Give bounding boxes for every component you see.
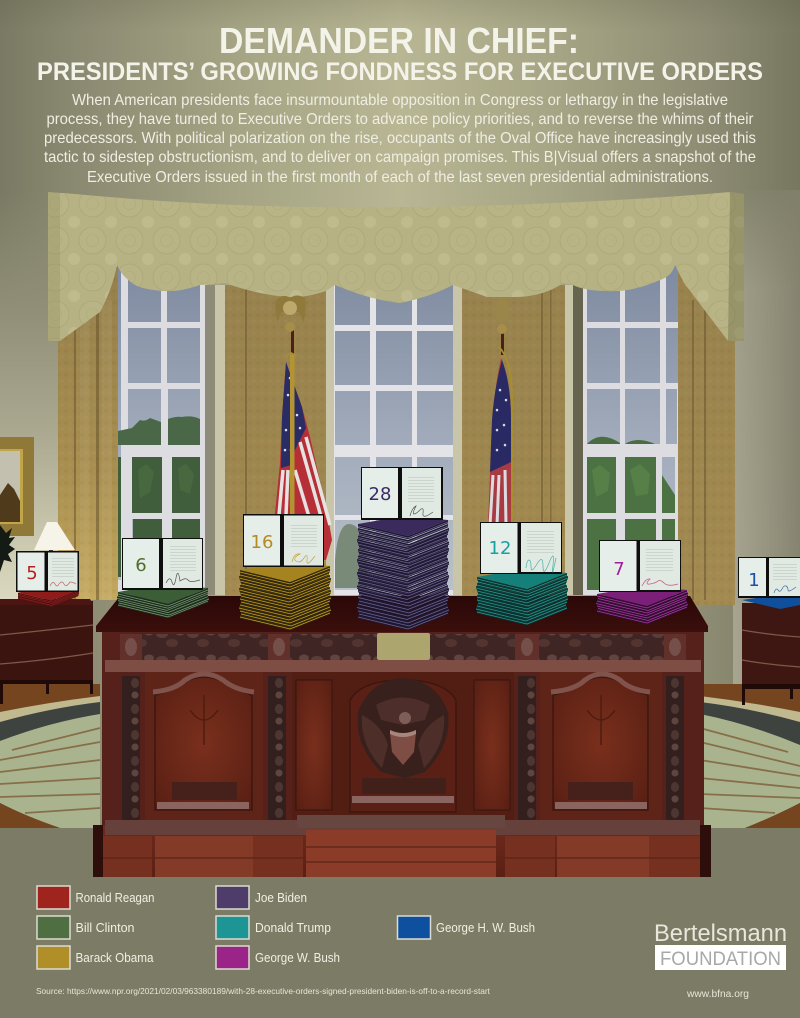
intro text: When American presidents face insurmountable opposition in Congress or lethargy in the legislative xyxy=(72,92,728,109)
stack: Donald Trump, 12 xyxy=(476,522,568,625)
legend: Donald Trump: Donald Trump xyxy=(255,921,331,935)
carved frieze xyxy=(120,634,686,660)
legend: George W. Bush xyxy=(216,946,340,969)
rug left xyxy=(0,696,100,828)
legend: George W. Bush: George W. Bush xyxy=(255,951,340,965)
picture frame xyxy=(0,437,34,536)
stack: Ronald Reagan, 5 xyxy=(16,551,79,607)
desk body xyxy=(102,628,704,828)
stack: Bill Clinton, 6 xyxy=(117,538,209,618)
legend: Barack Obama: Barack Obama xyxy=(76,951,154,965)
left flag xyxy=(274,296,332,560)
bottom band xyxy=(0,828,800,1018)
legend: Bill Clinton xyxy=(37,916,135,939)
curtains xyxy=(58,265,735,605)
open order: 12 xyxy=(489,538,511,559)
open order: 1 xyxy=(748,570,760,591)
open order: 6 xyxy=(135,555,147,576)
pile xyxy=(357,516,449,630)
title xyxy=(37,20,763,86)
stack: George W. Bush, 7 xyxy=(596,540,688,624)
legend: Joe Biden xyxy=(216,886,307,909)
open order xyxy=(361,467,443,520)
open order: 7 xyxy=(613,559,625,580)
right panel xyxy=(540,672,662,820)
left wall xyxy=(0,190,62,680)
legend: Ronald Reagan: Ronald Reagan xyxy=(76,891,155,905)
stack: George H. W. Bush, 1 xyxy=(738,557,800,609)
base plinth xyxy=(93,815,711,877)
intro text: predecessors. With political polarization on the rise, occupants of the Oval Office have increasingly used this xyxy=(44,130,756,147)
pile xyxy=(117,584,209,618)
room scene xyxy=(0,190,800,828)
pile xyxy=(476,569,568,625)
subheading: PRESIDENTS’ GROWING FONDNESS FOR EXECUTIVE ORDERS xyxy=(37,58,763,86)
cornice xyxy=(105,660,701,672)
intro text: tactic to sidestep obstructionism, and to deliver on campaign promises. This B|Visual offers a snapshot of the xyxy=(44,149,756,166)
brass plaque xyxy=(377,633,430,660)
presidential seal eagle xyxy=(357,678,449,778)
right wall xyxy=(733,190,800,690)
open order: 28 xyxy=(369,484,391,505)
lamp xyxy=(34,522,75,554)
centre window xyxy=(326,260,462,595)
main heading: DEMANDER IN CHIEF: xyxy=(219,20,579,61)
centre panels xyxy=(292,672,514,822)
pile xyxy=(18,587,79,607)
right window xyxy=(565,260,680,595)
rug right xyxy=(700,696,800,828)
left cabinet xyxy=(0,599,93,704)
right flag xyxy=(488,297,512,525)
desk top xyxy=(96,596,708,632)
legend: George H. W. Bush: George H. W. Bush xyxy=(436,921,535,935)
intro text: process, they have turned to Executive Orders to advance policy priorities, and to reverse the whims of their xyxy=(46,111,754,128)
pile xyxy=(742,596,800,609)
left window xyxy=(116,260,225,595)
pile xyxy=(239,562,331,630)
stack: Barack Obama, 16 xyxy=(239,514,331,630)
intro text: Executive Orders issued in the first month of each of the last seven presidential administrations. xyxy=(87,169,713,186)
right cabinet xyxy=(742,603,800,705)
legend: George H. W. Bush xyxy=(398,916,535,939)
carved pillars xyxy=(122,676,684,820)
logo: Bertelsmann Foundation: Bertelsmann xyxy=(654,920,787,947)
legend: Ronald Reagan xyxy=(37,886,155,909)
left panel xyxy=(145,672,263,820)
website: www.bfna.org xyxy=(686,988,749,1000)
source line: Source: https://www.npr.org/2021/02/03/963380189/with-28-executive-orders-signed-president-biden-is-off-to-a-record-start xyxy=(36,986,491,996)
desk xyxy=(93,596,711,877)
floor xyxy=(0,684,800,828)
valance xyxy=(48,192,744,341)
open order: 5 xyxy=(26,563,38,584)
stack: Joe Biden, 28 xyxy=(357,467,449,630)
legend: Joe Biden: Joe Biden xyxy=(255,891,307,905)
intro text xyxy=(44,92,756,186)
open order: 16 xyxy=(251,532,273,553)
plant xyxy=(0,525,15,572)
logo: Bertelsmann Foundation xyxy=(654,920,787,970)
legend: Donald Trump xyxy=(216,916,331,939)
legend xyxy=(37,886,535,969)
pile xyxy=(596,586,688,624)
legend: Bill Clinton: Bill Clinton xyxy=(76,921,135,935)
legend: Barack Obama xyxy=(37,946,154,969)
logo: Bertelsmann Foundation: FOUNDATION xyxy=(660,949,781,970)
